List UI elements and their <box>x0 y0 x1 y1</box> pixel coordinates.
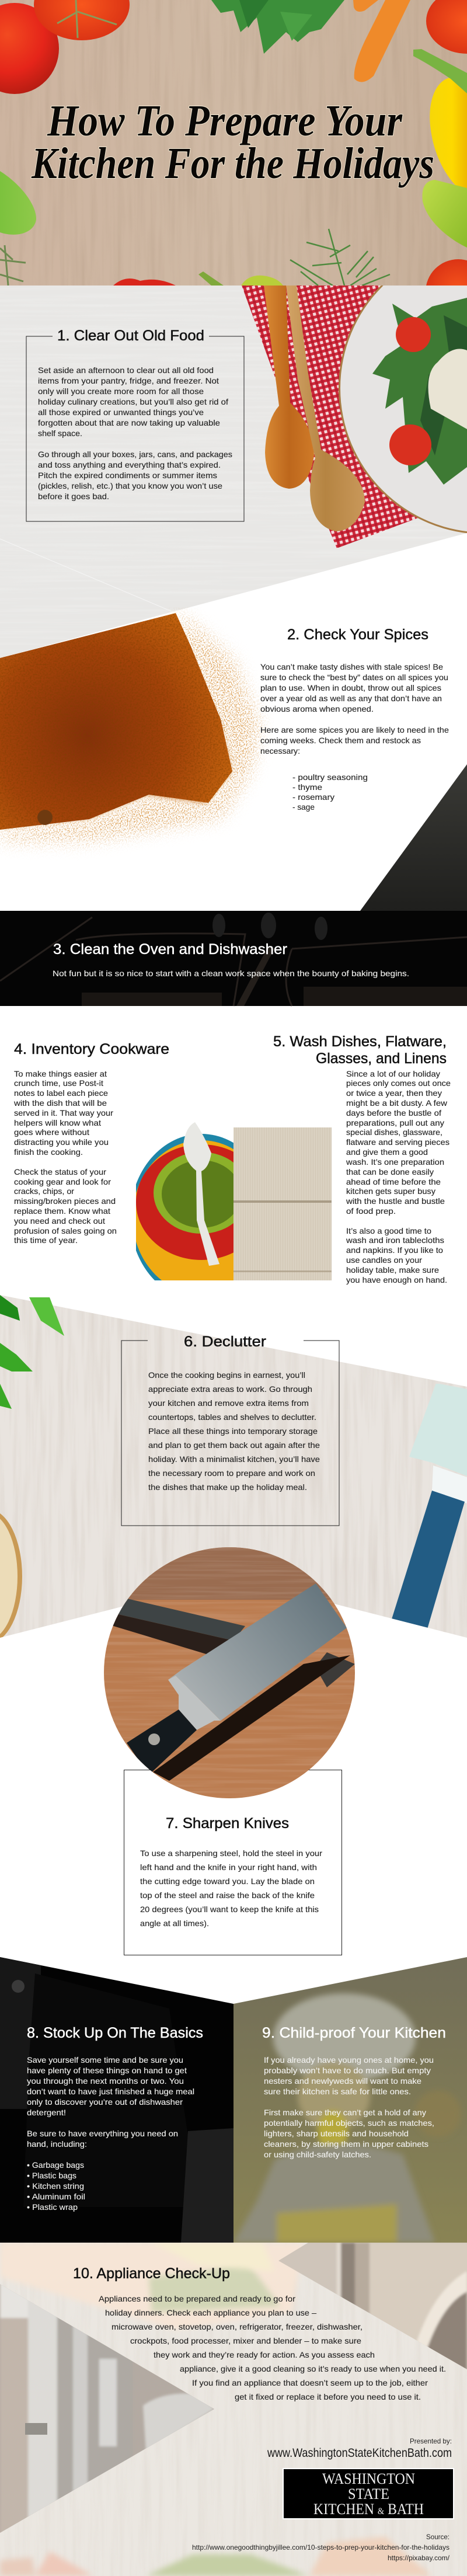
icon: green pepper bottom <box>198 271 283 286</box>
body copy <box>346 1069 451 1284</box>
supply list <box>27 2160 85 2212</box>
body copy: special dishes, glassware, <box>346 1127 442 1137</box>
body copy: holiday. With a minimalist kitchen, you’ll have <box>148 1454 320 1464</box>
icon: parsley <box>211 0 344 54</box>
body copy: sure their kitchen is safe for little ones. <box>264 2087 411 2096</box>
body copy: First make sure they can’t get a hold of any <box>264 2108 426 2117</box>
body copy: cleaners, by storing them in upper cabinets <box>264 2139 428 2149</box>
body copy: Not fun but it is so nice to start with a clean work space when the bounty of baking begins. <box>53 969 409 978</box>
icon: rosemary <box>290 229 390 286</box>
body copy: this time of year. <box>14 1235 78 1245</box>
body copy: profusion of sales going on <box>14 1226 117 1235</box>
heading: step 10: 10. Appliance Check-Up <box>73 2265 230 2282</box>
body copy: preparations, pull out any <box>346 1118 444 1127</box>
body copy: wash. It’s one preparation <box>346 1157 444 1167</box>
body copy: missing/broken pieces and <box>14 1196 116 1206</box>
body copy: Pitch the expired condiments or summer items <box>38 471 217 480</box>
icon: tomato top right <box>426 0 467 54</box>
text block: check your spices <box>260 626 449 812</box>
body copy: angle at all times). <box>140 1919 209 1928</box>
body copy: probably won’t have to do much. But empty <box>264 2066 431 2075</box>
body copy: before it goes bad. <box>38 492 109 501</box>
heading: step 8: 8. Stock Up On The Basics <box>27 2025 203 2041</box>
presented by <box>267 2437 452 2460</box>
logo: washington state kitchen and bath <box>283 2468 454 2519</box>
body copy: To make things easier at <box>14 1069 107 1078</box>
text block: declutter <box>121 1334 339 1526</box>
body copy <box>99 2294 446 2401</box>
body copy: days before the bustle of <box>346 1108 441 1118</box>
body copy: detergent! <box>27 2108 66 2117</box>
heading: step 6: 6. Declutter <box>184 1334 266 1350</box>
body copy: the dishes that make up the holiday meal. <box>148 1482 307 1492</box>
body copy: coming weeks. Check them and restock as <box>260 736 421 745</box>
body copy: finish the cooking. <box>14 1147 83 1157</box>
body copy: and plan to get them back out again after the <box>148 1440 320 1450</box>
body copy: Set aside an afternoon to clear out all old food <box>38 365 214 375</box>
panel: hero wood background <box>0 0 467 286</box>
text block: inventory cookware <box>13 1041 169 1245</box>
body copy: kitchen gets super busy <box>346 1186 435 1196</box>
icon: wooden spoon two <box>286 286 365 531</box>
body copy: use candles on your <box>346 1255 422 1265</box>
icon: bread slice <box>0 1509 22 1644</box>
image: colorful dishes with spoon <box>136 1122 234 1280</box>
body copy <box>264 2055 434 2159</box>
supply list: • Kitchen string <box>27 2181 84 2191</box>
text block: sharpen knives box <box>124 1770 342 1955</box>
heading: step 1: 1. Clear Out Old Food <box>57 328 204 344</box>
icon: yellow pepper <box>413 49 467 196</box>
body copy: You can’t make tasty dishes with stale spices! Be <box>260 662 443 671</box>
body copy <box>38 365 232 501</box>
body copy: obvious aroma when opened. <box>260 704 374 713</box>
body copy: and napkins. If you like to <box>346 1245 443 1255</box>
body copy: ahead of time before the <box>346 1177 441 1186</box>
body copy: your kitchen and remove extra items from <box>148 1398 309 1408</box>
body copy: cooking gear and look for <box>14 1177 111 1186</box>
body copy: of food prep. <box>346 1206 396 1216</box>
heading: step 5 <box>273 1033 447 1067</box>
spice list <box>292 772 368 812</box>
icon: green pepper <box>422 180 467 248</box>
body copy: forgotten about that are now taking up valuable <box>38 418 220 427</box>
body copy: goes where without <box>14 1127 89 1137</box>
body copy: you need and check out <box>14 1216 105 1226</box>
body copy <box>13 1069 117 1245</box>
image: knife on cutting board circle <box>104 1547 355 1798</box>
body copy: flatware and serving pieces <box>346 1137 449 1147</box>
heading: step 4: 4. Inventory Cookware <box>14 1041 169 1057</box>
body copy: pieces only comes out once <box>346 1078 451 1088</box>
source credits <box>192 2533 450 2562</box>
supply list: • Plastic wrap <box>27 2202 78 2212</box>
body copy: countertops, tables and shelves to declutter. <box>148 1412 316 1422</box>
body copy: sure to check the “best by” dates on all spices you <box>260 673 448 682</box>
body copy: nesters and newlyweds will want to make <box>264 2076 421 2086</box>
body copy: top of the steel and raise the back of the knife <box>140 1891 315 1900</box>
body copy: have plenty of these things on hand to get <box>27 2066 187 2075</box>
icon: tomato left <box>0 3 59 94</box>
panel: child-proof your kitchen <box>234 1950 467 2248</box>
heading: step 3: 3. Clean the Oven and Dishwasher <box>53 941 287 958</box>
heading: step 5: 5. Wash Dishes, Flatware, <box>273 1033 447 1050</box>
icon: tomato bottom right <box>426 259 467 286</box>
body copy: (pickles, relish, etc.) that you know you won’t use <box>38 481 222 490</box>
supply list: • Aluminum foil <box>27 2192 85 2201</box>
logo: washington state kitchen and bath: WASHINGTON <box>322 2470 415 2487</box>
panel: stock up on the basics <box>0 1950 234 2248</box>
body copy: plan to use. When in doubt, throw out all spices <box>260 683 441 692</box>
body copy: necessary: <box>260 746 300 756</box>
body copy: over a year old as well as any that don’t have an <box>260 694 442 703</box>
image: dark sink corner wedge <box>360 764 467 911</box>
body copy: get it fixed or replace it before you need to use it. <box>235 2392 421 2401</box>
body copy: microwave oven, stovetop, oven, refrigerator, freezer, dishwasher, <box>111 2322 363 2331</box>
panel: declutter wood background <box>0 1290 467 1644</box>
body copy: If you already have young ones at home, you <box>264 2055 434 2065</box>
spice list: - thyme <box>292 782 322 792</box>
icon: tomato top <box>34 0 130 40</box>
text block: wash dishes <box>273 1033 451 1284</box>
body copy: Go through all your boxes, jars, cans, and packages <box>38 450 232 459</box>
body copy: appliance, give it a good cleaning so it’s ready to use when you need it. <box>180 2364 446 2373</box>
body copy: Be sure to have everything you need on <box>27 2129 178 2138</box>
body copy: To use a sharpening steel, hold the steel in your <box>140 1849 322 1858</box>
body copy: hand, including: <box>27 2139 87 2149</box>
body copy: Once the cooking begins in earnest, you’ll <box>148 1370 305 1380</box>
image: chili powder pile <box>0 607 271 854</box>
body copy: holiday table, make sure <box>346 1265 439 1275</box>
body copy: don’t want to have just finished a huge meal <box>27 2087 194 2096</box>
body copy: that can be done easily <box>346 1167 434 1176</box>
body copy: only will you create more room for all those <box>38 387 204 396</box>
body copy: 20 degrees (you’ll want to keep the knife at this <box>140 1905 319 1914</box>
body copy: you through the next months or two. You <box>27 2076 184 2086</box>
icon: cucumber <box>0 171 36 235</box>
icon: red checkered napkin <box>242 286 429 548</box>
icon: green leaves <box>0 1295 64 1409</box>
heading: step 5: Glasses, and Linens <box>316 1050 447 1067</box>
body copy: lighters, sharp utensils and household <box>264 2129 409 2138</box>
body copy: served in it. That way your <box>14 1108 113 1118</box>
body copy: Check the status of your <box>14 1167 106 1176</box>
body copy: the cutting edge toward you. Lay the blade on <box>140 1877 315 1886</box>
heading: step 9: 9. Child-proof Your Kitchen <box>262 2025 446 2041</box>
spice list: - poultry seasoning <box>292 772 368 782</box>
body copy: It’s also a good time to <box>346 1226 431 1235</box>
body copy: Appliances need to be prepared and ready to go for <box>99 2294 295 2303</box>
panel: section 1 background <box>0 286 467 658</box>
body copy: the necessary room to prepare and work on <box>148 1468 315 1478</box>
body copy: potentially harmful objects, such as matches, <box>264 2118 434 2128</box>
body copy: wash and iron tablecloths <box>346 1235 444 1245</box>
body copy: Since a lot of our holiday <box>346 1069 440 1078</box>
panel: clean the oven and dishwasher <box>0 911 467 1006</box>
supply list: • Garbage bags <box>27 2160 84 2170</box>
title: How To Prepare Your <box>47 96 403 145</box>
body copy <box>148 1370 320 1492</box>
body copy: items from your pantry, fridge, and freezer. Not <box>38 376 219 385</box>
body copy: replace them. Know what <box>14 1206 110 1216</box>
body copy <box>27 2055 194 2149</box>
body copy: they work and they’re ready for action. As you assess each <box>154 2350 375 2359</box>
body copy: If you find an appliance that doesn’t seem up to the job, either <box>192 2378 428 2387</box>
body copy: or using child-safety latches. <box>264 2150 371 2159</box>
body copy <box>260 662 449 756</box>
source credits: Source: <box>426 2533 449 2541</box>
body copy: Place all these things into temporary storage <box>148 1426 318 1436</box>
supply list: • Plastic bags <box>27 2171 76 2180</box>
icon: thyme sprig <box>0 245 26 286</box>
body copy: or twice a year, then they <box>346 1088 442 1098</box>
body copy: holiday dinners. Check each appliance you plan to use – <box>105 2308 316 2317</box>
body copy: crockpots, food processer, mixer and blender – to make sure <box>130 2336 361 2345</box>
icon: wooden spoon one <box>264 286 314 489</box>
heading: step 2: 2. Check Your Spices <box>287 626 428 643</box>
spice list: - rosemary <box>292 792 334 802</box>
body copy: and give them a good <box>346 1147 428 1157</box>
body copy: appreciate extra areas to work. Go through <box>148 1384 312 1394</box>
icon: knife with blue handle <box>392 1383 467 1629</box>
body copy: might be a bit dusty. A few <box>346 1098 448 1108</box>
icon: carrots <box>353 0 410 82</box>
body copy: you have enough on hand. <box>346 1275 447 1284</box>
panel: appliance check-up background <box>0 2243 467 2576</box>
logo: washington state kitchen and bath: STATE <box>348 2486 389 2502</box>
image: folded linens <box>234 1127 332 1280</box>
body copy: shelf space. <box>38 429 82 438</box>
body copy: crunch time, use Post-it <box>14 1078 103 1088</box>
icon: red pepper bottom <box>113 279 176 286</box>
source credits: https://pixabay.com/ <box>388 2554 450 2562</box>
icon: salad plate <box>339 286 467 534</box>
body copy: Here are some spices you are likely to need in the <box>260 725 449 734</box>
body copy: and toss anything and everything that’s expired. <box>38 460 221 469</box>
body copy: with the dish that will be <box>13 1098 107 1108</box>
body copy: cracks, chips, or <box>14 1186 74 1196</box>
title <box>31 96 434 188</box>
body copy: distracting you while you <box>14 1137 109 1147</box>
source credits: http://www.onegoodthingbyjillee.com/10-steps-to-prep-your-kitchen-for-the-holidays <box>192 2543 449 2551</box>
body copy: only to discover you’re out of dishwasher <box>27 2097 183 2107</box>
logo: washington state kitchen and bath: KITCHEN & BATH <box>313 2501 424 2518</box>
heading: step 7: 7. Sharpen Knives <box>166 1815 289 1832</box>
body copy: left hand and the knife in your right hand, with <box>140 1863 317 1872</box>
spice list: - sage <box>292 802 315 812</box>
body copy: holiday culinary creations, but you’ll also get rid of <box>38 397 228 406</box>
body copy: all those expired or unwanted things you’ve <box>38 408 204 417</box>
body copy: notes to label each piece <box>14 1088 108 1098</box>
body copy: Save yourself some time and be sure you <box>27 2055 183 2065</box>
text block: clear out old food <box>26 328 244 521</box>
image: washer interior upper right <box>274 2243 467 2371</box>
body copy <box>140 1849 322 1928</box>
image: washer door with towel lower left <box>0 2277 216 2534</box>
presented by: Presented by: <box>410 2437 452 2445</box>
body copy: helpers will know what <box>14 1118 101 1127</box>
body copy: with the hustle and bustle <box>346 1196 445 1206</box>
